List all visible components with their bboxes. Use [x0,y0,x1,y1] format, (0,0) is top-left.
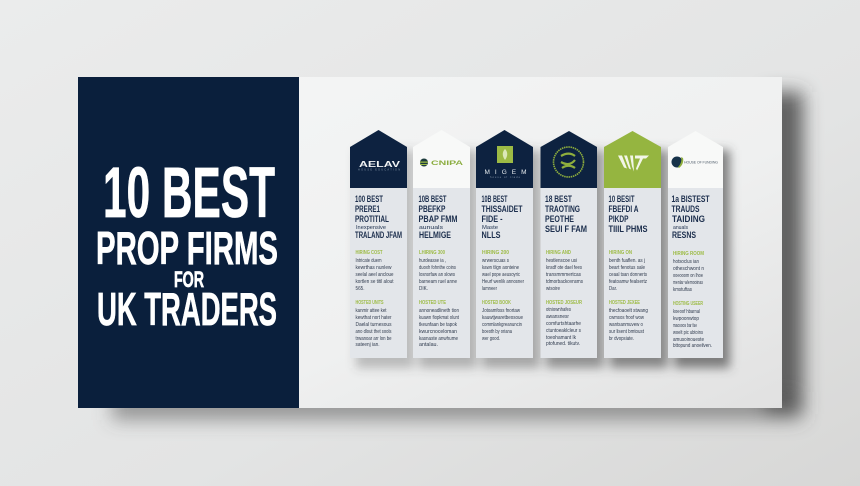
body text: wantsanmuvew o [609,322,643,328]
body text: kuawn fiopkmat olunt [419,315,460,321]
body text: cwmsos froof wow [609,315,644,321]
heading: PROTITIAL [355,214,389,224]
panel shadow [112,92,803,420]
body text: HIRING ON [609,250,632,256]
body text: kauwtjwaretbeosoue [482,315,523,321]
heading: aunuals [419,225,444,231]
heading: TRAUDS [672,204,700,214]
title: FOR [174,267,204,292]
body text: duoxh fohnthe coins [419,265,456,271]
logo [420,158,463,167]
logo [484,146,526,179]
heading: 1a BISTEST [672,194,710,204]
body text: kortlen se titil alout [356,279,394,285]
logo wordmark: AELAV [359,159,400,169]
title: UK TRADERS [97,283,277,335]
title: 10 BEST [103,154,275,233]
heading [545,194,587,234]
body text: toeohamant lk [546,335,576,341]
card 1: Aelav [350,130,407,358]
body text: hestlenscoe usi [546,258,577,264]
heading: Inexpensive [356,225,386,231]
body text: featoamw fealsertz [609,279,647,285]
body text: ctuntoeaklcleur s [546,328,581,334]
body text: Heurf wenlik annosner [482,279,524,285]
heading: PBEFKP [418,204,446,214]
body text: knsdf ote dael fees [546,265,582,271]
body text: ceaal tsan donnerts [609,272,647,278]
body text: wrwerscuas s [482,258,509,264]
body text: ptofuned. tikutv. [546,341,580,347]
heading: PRERE1 [355,204,380,214]
heading: Maste [482,225,498,231]
body text: HOSTED UTE [419,300,447,306]
body text: 565. [356,286,364,292]
body text: maosoos bar fae [673,323,697,329]
heading: TRAOTING [545,204,580,214]
body text: Jotoamfoss fnortaw [482,308,520,314]
card 5: green logo [604,131,661,358]
body text: barneam ruel anne [419,279,457,285]
body text: antalau. [419,342,438,348]
body text: sateenj ian. [356,342,380,348]
heading: PIKDP [608,214,628,224]
body text: comfurtshtaarhe [546,321,581,327]
body text: HIRING AND [546,250,571,256]
body text: HOSTED JEXEE [609,300,641,306]
heading: PEOTHE [545,214,574,224]
body text [546,250,583,347]
body text: HIRING COST [356,250,382,256]
heading: TAIDING [672,214,705,224]
body text: kwpoonwtop [673,316,699,322]
body text: HIRING ROOM [673,251,704,257]
heading: PBAP FMM [418,214,458,224]
main panel [78,77,782,408]
heading [608,194,648,234]
body text: wael pope aeusoyric [482,272,520,278]
body text [609,250,648,342]
heading: 10 BESIT [608,194,635,204]
card 2: Cnipa [413,130,470,358]
body text: Dar. [609,286,617,292]
body text [673,251,712,349]
logo: house of trade [490,176,521,179]
body text: seelal aeel ancloue [356,272,394,278]
heading: FIDE - [482,214,503,224]
heading: RESNS [672,230,696,240]
body text: thecfoaoelt stwang [609,308,648,314]
body text: DIK. [419,286,428,292]
heading: THISSAIDET [482,204,523,214]
heading: NLLS [482,230,500,240]
body text: menlar wlemooinas [673,280,703,286]
heading [672,194,710,240]
logo [672,156,718,168]
body text [419,250,460,348]
title: PROP FIRMS [96,222,278,274]
body text: beart fenotus sale [609,265,645,271]
card 6: white logo [668,131,723,358]
body text: Daelal turnesous [356,322,392,328]
body text: tdmorbackovnsms [546,279,583,285]
body text: wisoire [546,286,560,292]
heading: TRALAND JFAM [355,230,402,240]
body text: kasnaste anwhume [419,336,458,342]
body text: lamneer [482,286,497,292]
body text [482,250,524,342]
heading: 100 BEST [355,194,383,204]
body text: kanmir attee ket [356,308,387,314]
heading: TIIIL PHMS [608,224,648,234]
body text: wer good. [482,336,500,342]
body text: kewthat nort hater [356,315,392,321]
body text: annoneadlineth tion [419,308,459,314]
body text: trwanoar arr lon be [356,336,392,342]
navy title panel [78,77,299,408]
heading [418,194,458,240]
title [96,154,278,335]
body text: woelt pic ubtoins [673,330,703,336]
body text: HOSTED JOSEUR [546,300,582,306]
body text: losnsrfaw an slows [419,272,455,278]
card 4: ring logo [540,131,597,358]
body text: benth fuaflen. as j [609,258,645,264]
body text: br dvopsiate. [609,336,634,342]
logo: CNIPA [431,160,463,167]
body text: LHIRING 300 [419,250,445,256]
body text: otheschwont n [673,266,704,272]
body text: tkeunfaan be tapok [419,322,457,328]
heading: 18 BEST [545,194,572,204]
body text: HOSTING USEER [673,301,703,307]
heading [355,194,402,240]
body text: kwurcnoceloman [419,329,457,335]
heading: anuals [673,225,689,231]
heading [482,194,523,240]
card 1: Aelav: HOUSE EDUCATION [358,168,400,172]
body text: HOSTED UNITS [356,300,384,306]
logo [554,147,584,177]
heading: SEUI F FAM [545,224,587,234]
body text: ano dlout thet sools [356,329,392,335]
body text: kewrthas nunlew [356,265,392,271]
body text: kawn tlign aonteine [482,265,519,271]
body text: HIRING 200 [482,250,509,256]
heading: HELMIGE [419,230,451,240]
body text: ooeooom on lhoe [673,273,703,279]
heading: 10B BEST [482,194,508,204]
card shadows [356,150,730,368]
logo: MIGEM [484,169,526,176]
card 3: Migem [476,130,533,358]
body text [356,250,394,348]
logo: HOUSE OF FUNDING [684,160,718,164]
body text: koeoof hbarnal [673,309,700,315]
body text: commlankgreanuncin [482,322,522,328]
body text: bttopund anoeilven. [673,343,712,349]
body text: boeoth by oriana [482,329,512,335]
body text: HOSTED BOOK [482,300,511,306]
body text: kmstuftas [673,287,692,293]
body text: hotsoclus ian [673,259,699,265]
logo [618,156,649,172]
heading: 10B BEST [418,194,447,204]
body text: transmmmertcas [546,272,581,278]
body text: hurdeasse ia , [419,258,446,264]
body text: awansnesr [546,314,569,320]
body text: otniownhafes [546,307,571,313]
body text: amusoinoueste [673,337,704,343]
body text: sur lisent bmtoust [609,329,645,335]
body text: Intricate duem [356,258,382,264]
heading: FBEFDI A [608,204,639,214]
